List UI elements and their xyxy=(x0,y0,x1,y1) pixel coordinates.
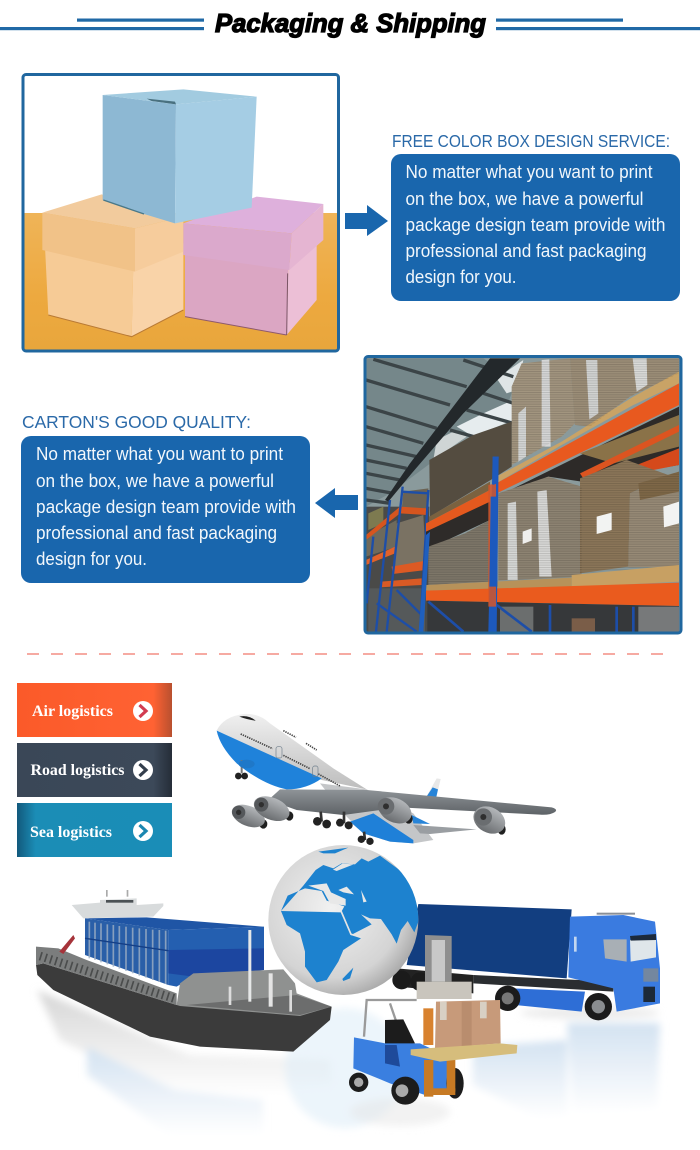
icon: blue box xyxy=(103,89,257,223)
button: air logistics: Air logistics xyxy=(32,703,113,720)
text panel: design service: package design team provide with xyxy=(406,215,666,235)
button: sea logistics: Sea logistics xyxy=(30,824,112,841)
icon: orange box xyxy=(42,194,183,337)
button: air logistics xyxy=(17,683,172,737)
carton xyxy=(435,1000,501,1048)
seat xyxy=(385,1019,415,1045)
forklift with carton xyxy=(349,935,517,1105)
text panel: design service: No matter what you want to print xyxy=(406,162,652,182)
fuselage belly xyxy=(217,731,322,789)
panel: warehouse photo xyxy=(364,356,682,634)
pallets xyxy=(493,372,679,485)
gear xyxy=(235,760,374,845)
airplane xyxy=(217,714,556,845)
wheels xyxy=(585,993,612,1020)
globe xyxy=(268,845,419,995)
orange beams xyxy=(493,383,679,495)
text panel: design service: on the box, we have a powerful xyxy=(406,189,644,209)
low pallets xyxy=(572,565,679,587)
button: sea logistics xyxy=(17,803,172,857)
under beam xyxy=(497,407,679,497)
wheel: far fork wheel xyxy=(446,1068,464,1099)
text panel: carton quality: No matter what you want to print xyxy=(36,444,283,464)
arrow: right xyxy=(345,205,388,236)
title: Packaging & Shipping xyxy=(215,8,486,38)
text panel: design service: design for you. xyxy=(406,267,516,287)
rear fuselage xyxy=(320,783,433,843)
text panel: carton quality xyxy=(21,436,310,583)
text panel: carton quality: on the box, we have a powerful xyxy=(36,471,274,491)
overhead guard xyxy=(364,1000,417,1067)
button: road logistics xyxy=(17,743,172,797)
pallet xyxy=(411,1043,517,1062)
fuselage top xyxy=(217,714,367,789)
far wing xyxy=(268,789,556,815)
text panel: design service: professional and fast packaging xyxy=(406,241,646,261)
icon: pink box xyxy=(183,197,323,335)
bottom xyxy=(427,601,679,632)
lower cartons xyxy=(498,477,582,581)
panel: color box photo xyxy=(22,74,339,352)
container ship xyxy=(36,890,332,1052)
heading: carton's good quality: CARTON'S GOOD QUALITY: xyxy=(22,412,251,432)
upper cartons xyxy=(512,358,575,465)
engines xyxy=(229,791,510,839)
hull xyxy=(36,963,332,1052)
mast xyxy=(425,935,452,982)
wheels xyxy=(349,1073,368,1092)
heading: free color box design service: FREE COLOR BOX DESIGN SERVICE: xyxy=(392,131,670,151)
arrow: left xyxy=(315,488,358,518)
body xyxy=(353,1037,455,1095)
cab xyxy=(568,915,660,1012)
left rack xyxy=(366,507,429,632)
blue posts xyxy=(488,457,499,632)
button: road logistics: Road logistics xyxy=(30,762,124,779)
bow deck xyxy=(177,930,332,1016)
low beam xyxy=(426,583,679,606)
container xyxy=(407,904,572,978)
text panel: design service xyxy=(391,154,680,301)
superstructure xyxy=(72,890,163,918)
truck xyxy=(392,904,660,1020)
header rules xyxy=(0,18,700,30)
red crane xyxy=(59,935,75,954)
forks xyxy=(424,1060,455,1097)
text panel: carton quality: design for you. xyxy=(36,549,147,569)
tail fin xyxy=(426,778,441,798)
reflections on floor xyxy=(37,990,660,1135)
containers xyxy=(85,917,264,987)
text panel: carton quality: professional and fast packaging xyxy=(36,523,277,543)
text panel: carton quality: package design team provide with xyxy=(36,497,296,517)
